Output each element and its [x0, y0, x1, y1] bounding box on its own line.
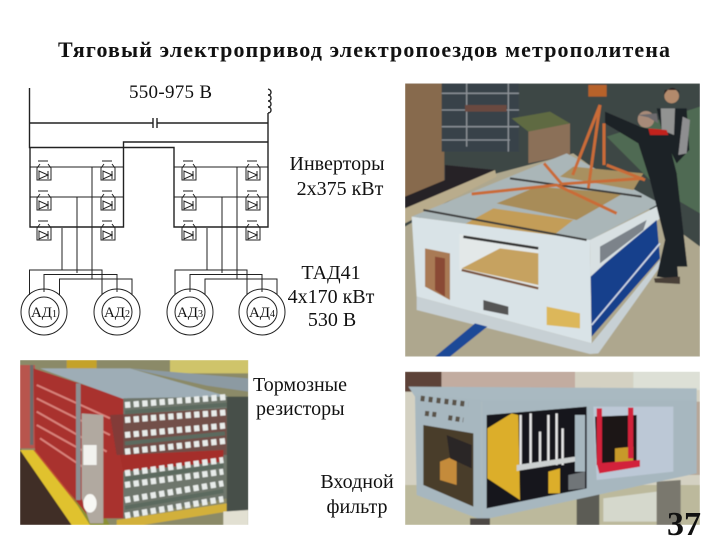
- motor АД1: АД1: [31, 305, 57, 321]
- DC link with capacitor and inductor: [30, 88, 271, 227]
- second man: [657, 108, 689, 163]
- motor АД4: АД4: [249, 305, 275, 321]
- photo: braking resistors: [20, 360, 248, 525]
- circuit diagram: [21, 82, 285, 335]
- label: inverters: 2х375 кВт: [297, 178, 384, 200]
- label: input filter: Входной: [320, 471, 394, 493]
- label: braking resistors: Тормозные: [253, 374, 347, 396]
- straps: [472, 105, 645, 213]
- voltage label: 550-975 В: [129, 82, 212, 103]
- motor buses: [30, 270, 277, 295]
- motor АД3: АД3: [177, 305, 203, 321]
- motor АД2: [94, 289, 140, 335]
- label: traction motors: ТАД41: [301, 262, 361, 284]
- man with straps: [605, 112, 687, 280]
- photo: inverter container being lifted: [405, 83, 700, 357]
- title: Тяговый электропривод электропоездов метрополитена: [58, 37, 670, 62]
- label: input filter: фильтр: [326, 496, 388, 518]
- label: traction motors: 4х170 кВт: [288, 286, 375, 308]
- label: traction motors: 530 В: [308, 309, 356, 331]
- motor АД1: [21, 289, 67, 335]
- motor АД4: [239, 289, 285, 335]
- motor АД2: АД2: [104, 305, 130, 321]
- label: inverters: Инверторы: [290, 153, 384, 175]
- inverter 1: [30, 161, 123, 279]
- label: braking resistors: резисторы: [256, 398, 345, 420]
- photo: input filter cabinet: [405, 372, 700, 525]
- motor АД3: [167, 289, 213, 335]
- inverter 2: [174, 161, 268, 279]
